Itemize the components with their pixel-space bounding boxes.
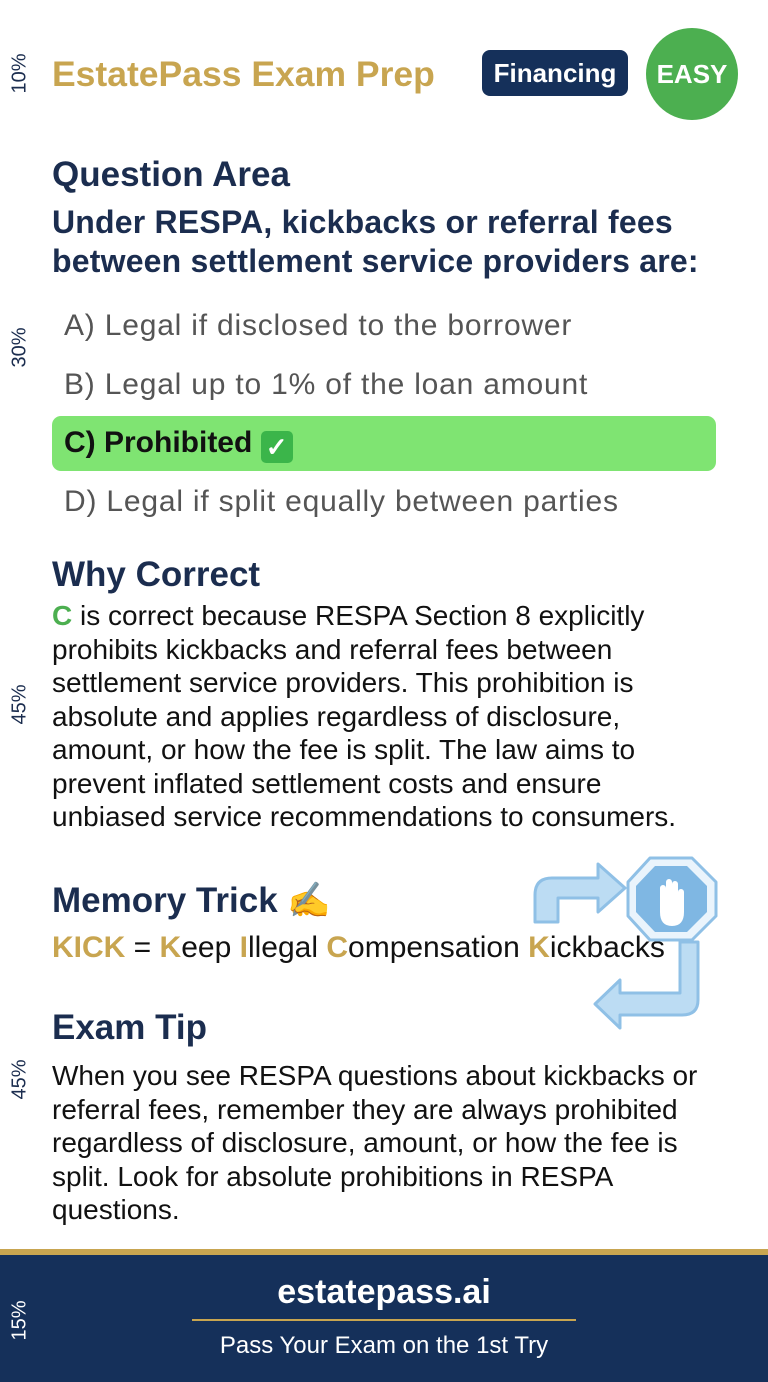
- option A: A) Legal if disclosed to the borrower: [64, 309, 572, 342]
- option B: B) Legal up to 1% of the loan amount: [64, 368, 588, 401]
- explanation text: settlement service providers. This prohibition is: [52, 667, 634, 698]
- badge: EASY: EASY: [657, 59, 727, 89]
- question text: Under RESPA, kickbacks or referral fees: [52, 204, 673, 240]
- exam tip text: questions.: [52, 1194, 180, 1225]
- icon: arrows and stop hand: [534, 856, 718, 1030]
- explanation text: prohibits kickbacks and referral fees between: [52, 634, 612, 664]
- question text: [52, 204, 699, 279]
- heading: Question Area: Question Area: [52, 155, 290, 194]
- explanation text: amount, or how the fee is split. The law aims to: [52, 734, 635, 765]
- side label 30%: 30%: [8, 327, 30, 368]
- exam tip text: [52, 1060, 697, 1225]
- badge: Financing: [482, 50, 628, 96]
- mnemonic: KICK = Keep Illegal Compensation Kickbacks: [52, 931, 665, 964]
- badge: Financing: Financing: [494, 58, 616, 88]
- exam tip text: referral fees, remember they are always prohibited: [52, 1094, 678, 1124]
- explanation text: C is correct because RESPA Section 8 explicitly: [52, 600, 644, 631]
- option C correct: C) Prohibited: [64, 426, 252, 459]
- side label 15%: 15%: [8, 1300, 30, 1341]
- footer brand: estatepass.ai: [277, 1273, 491, 1311]
- explanation text: [52, 600, 676, 832]
- heading: Exam Tip: Exam Tip: [52, 1008, 207, 1047]
- option D: D) Legal if split equally between parties: [64, 485, 619, 518]
- option C correct: [52, 416, 716, 471]
- explanation text: unbiased service recommendations to consumers.: [52, 801, 676, 832]
- footer tagline: Pass Your Exam on the 1st Try: [220, 1332, 548, 1359]
- exam tip text: When you see RESPA questions about kickbacks or: [52, 1060, 697, 1091]
- exam tip text: split. Look for absolute prohibitions in RESPA: [52, 1160, 613, 1192]
- explanation text: absolute and applies regardless of disclosure,: [52, 700, 620, 732]
- heading: Memory Trick: Memory Trick ✍: [52, 881, 331, 920]
- title: EstatePass Exam Prep: [52, 54, 435, 94]
- side label 45% bottom: 45%: [8, 1059, 30, 1100]
- badge: EASY: [646, 28, 738, 120]
- side label 10%: 10%: [8, 53, 30, 94]
- exam tip text: regardless of disclosure, amount, or how the fee is: [52, 1127, 678, 1158]
- footer: [0, 1249, 768, 1382]
- side label 45%: 45%: [8, 684, 30, 725]
- explanation text: prevent inflated settlement costs and ensure: [52, 768, 601, 798]
- heading: Why Correct: Why Correct: [52, 555, 260, 594]
- question text: between settlement service providers are:: [52, 243, 699, 279]
- option C correct: ✓: [266, 432, 288, 462]
